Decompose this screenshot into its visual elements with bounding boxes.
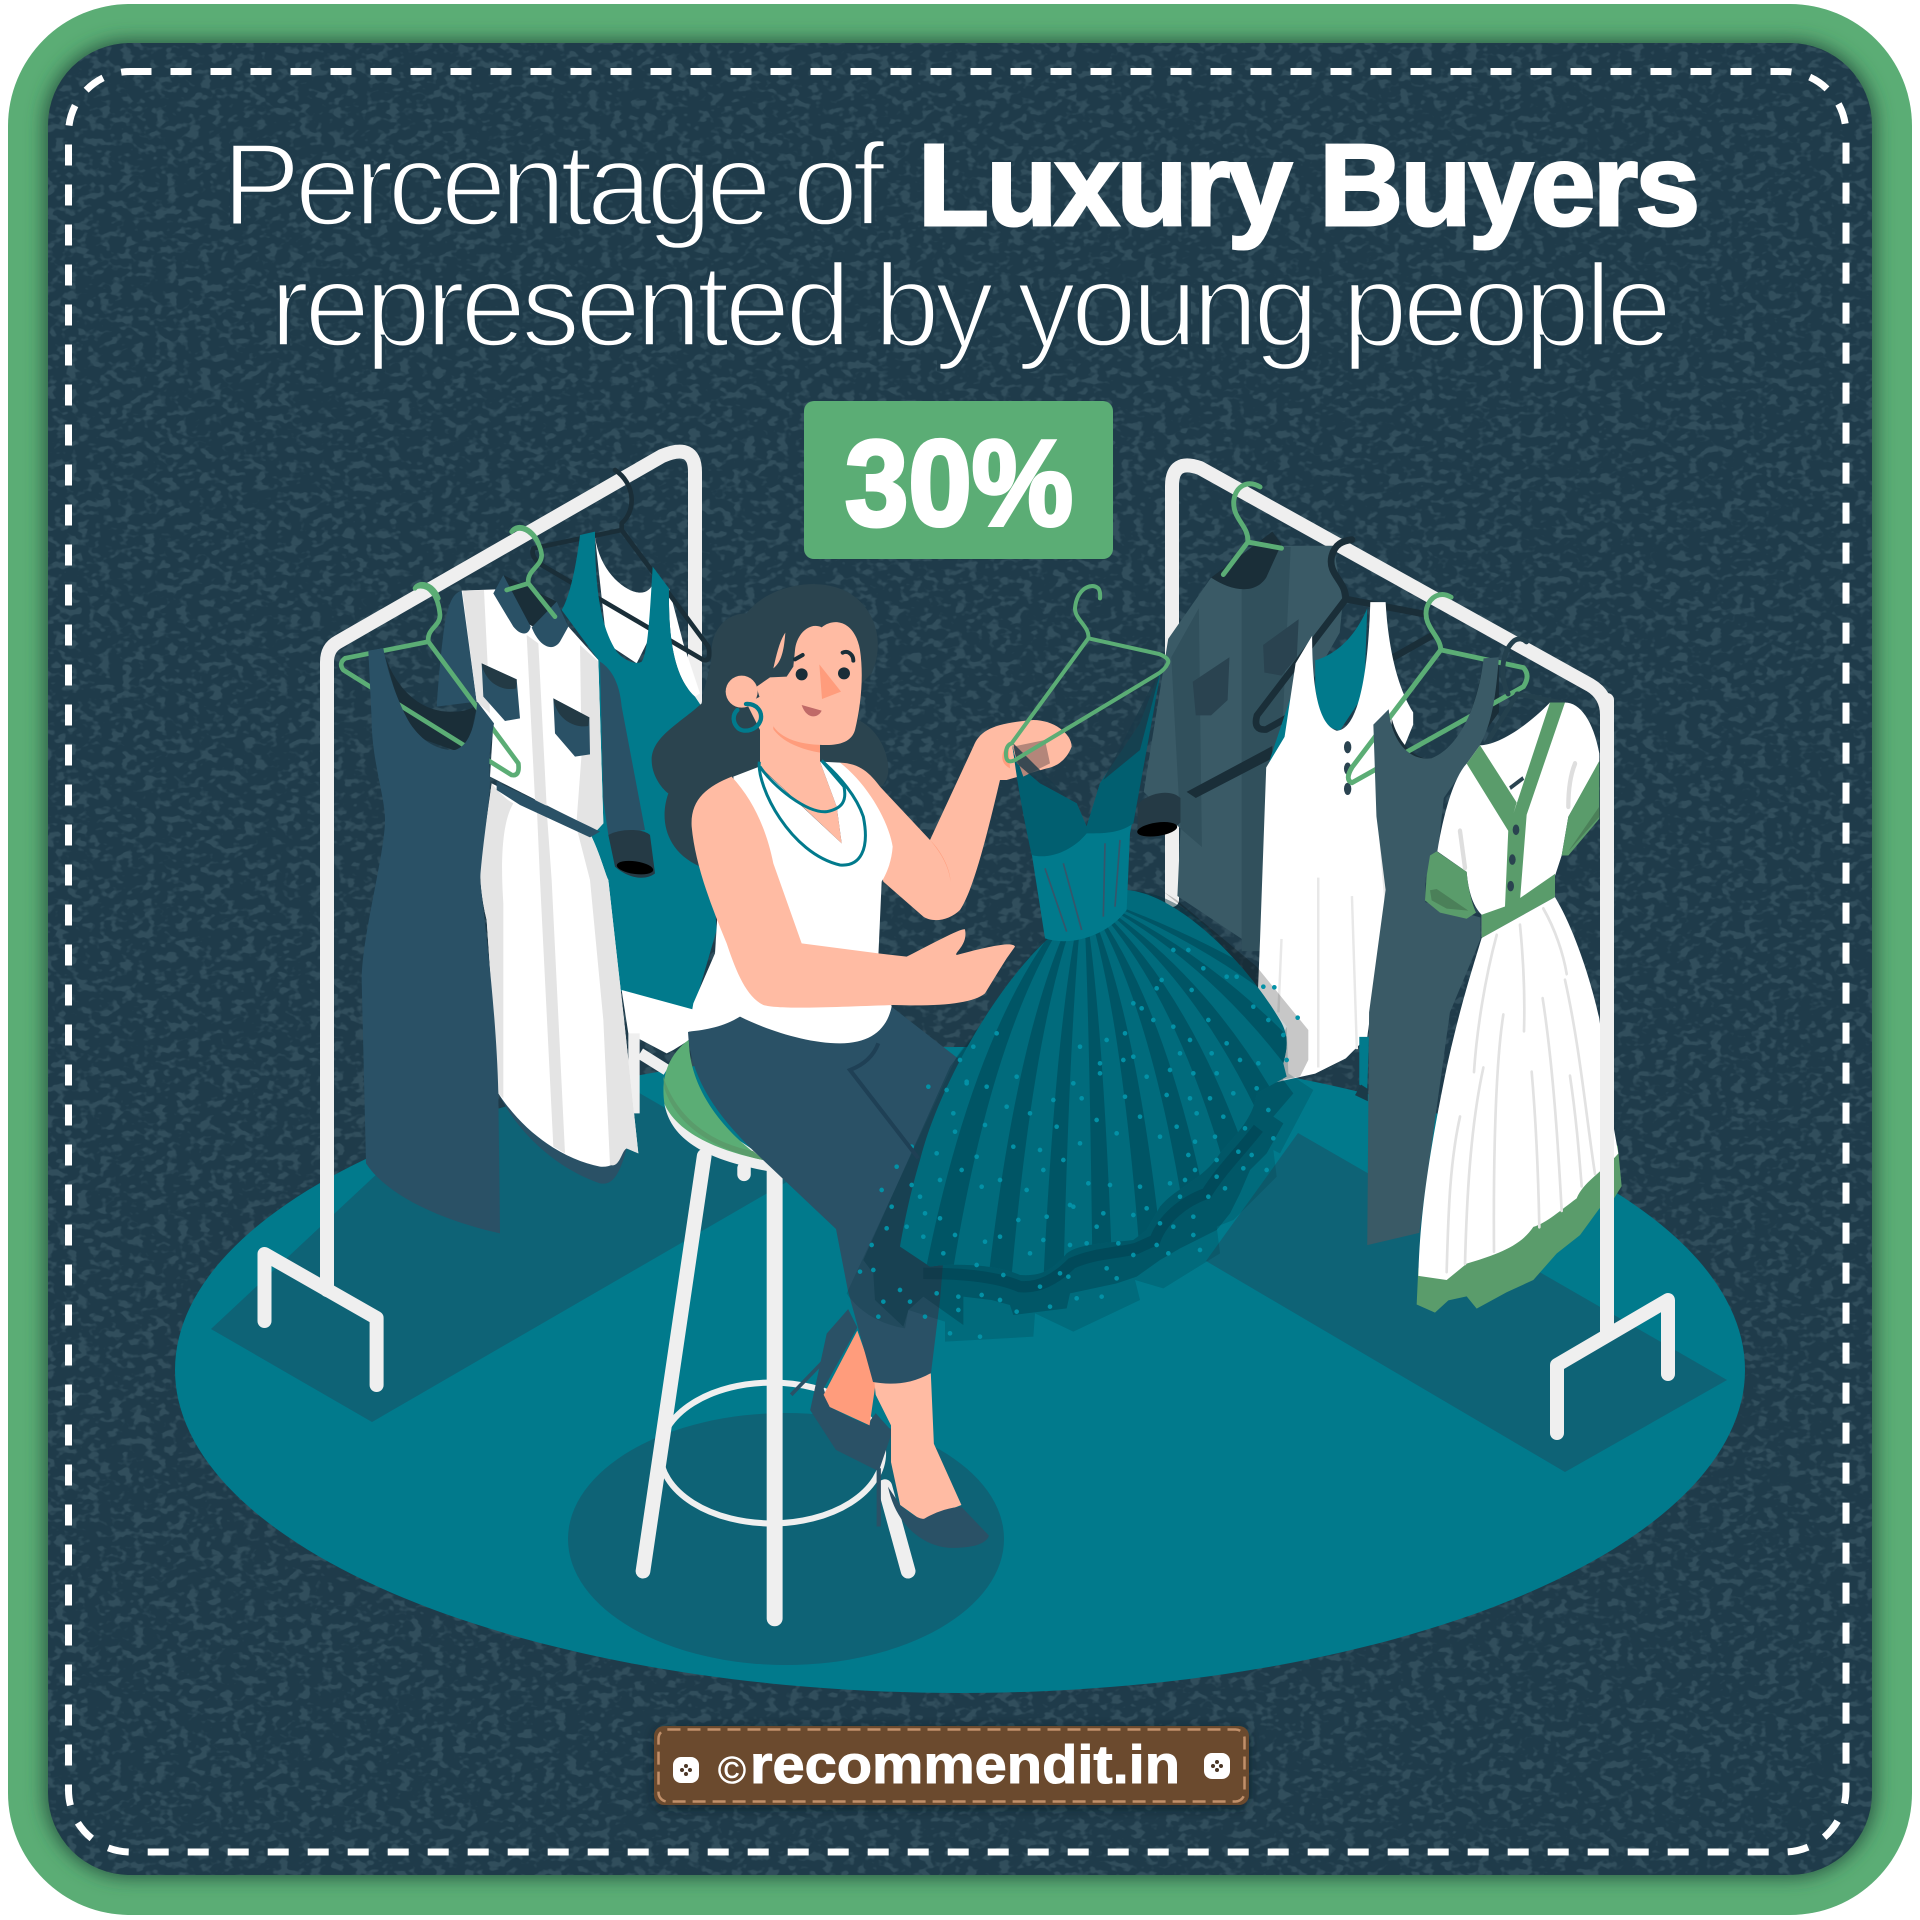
coat cuff xyxy=(608,830,655,878)
dark hanger right xyxy=(1487,639,1563,743)
buttons xyxy=(1507,824,1519,891)
coat belt xyxy=(1187,746,1272,798)
green hanger two xyxy=(507,528,555,617)
mid tulle xyxy=(863,892,1293,1327)
earring xyxy=(734,704,761,731)
right button xyxy=(1204,1753,1230,1779)
slate dress xyxy=(1367,657,1499,1245)
rear shoe xyxy=(810,1309,892,1471)
tag stitching xyxy=(658,1730,1244,1802)
sleeve crease xyxy=(1460,764,1575,868)
mouth xyxy=(802,705,822,716)
woman hair back xyxy=(652,584,888,867)
gown bodice xyxy=(1006,586,1168,941)
green hanger one xyxy=(341,586,519,775)
coat sleeve xyxy=(600,662,645,835)
woman pants xyxy=(688,1007,960,1384)
thumb shadow xyxy=(1002,743,1010,768)
white coat lower hem shadow xyxy=(498,1093,627,1184)
coat collar xyxy=(503,575,557,627)
stool seat rim xyxy=(664,1095,781,1171)
woman left arm and hand xyxy=(692,777,1015,1008)
neck shadow xyxy=(768,720,820,753)
bodice body xyxy=(1012,667,1162,941)
right rug shadow xyxy=(1206,1133,1727,1472)
coat cuff opening xyxy=(1136,820,1178,839)
woman legs and shoes xyxy=(791,1309,989,1548)
title line 1 light: Percentage of xyxy=(222,119,885,251)
eyes xyxy=(796,667,850,680)
brows xyxy=(795,652,853,661)
skirt hem shadow xyxy=(923,1128,1258,1287)
stool legs xyxy=(643,1156,908,1618)
cuff opening xyxy=(616,859,654,876)
title line 2: represented by young people xyxy=(270,240,1672,372)
stool shadow xyxy=(568,1413,1004,1665)
stool seat xyxy=(663,1040,764,1160)
face xyxy=(757,622,862,745)
gown hanger xyxy=(1006,586,1168,761)
copyright mark: © xyxy=(718,1750,746,1792)
skirt pleats xyxy=(927,910,1287,1272)
right arm xyxy=(840,720,1072,920)
skirt main xyxy=(900,890,1287,1275)
green hanger right xyxy=(1223,484,1527,783)
skirt pleats xyxy=(1447,909,1595,1272)
white dress teal lining xyxy=(1269,608,1367,766)
back rack foot xyxy=(634,1033,667,1113)
necklace xyxy=(759,761,865,865)
green trim xyxy=(1467,702,1599,938)
white top xyxy=(688,762,893,1043)
front leg xyxy=(874,1373,961,1520)
bodice pleat lines xyxy=(1045,840,1120,932)
percentage badge xyxy=(804,401,1113,559)
arm shadow xyxy=(930,840,951,882)
gathered fabric over fingers xyxy=(1013,740,1050,777)
nose xyxy=(819,664,841,699)
neck line xyxy=(1510,778,1523,788)
right rack hooks and front post xyxy=(1557,700,1668,1433)
left clothing rack xyxy=(264,452,695,1385)
ear lobe join xyxy=(747,690,773,730)
brand name: recommendit.in xyxy=(750,1735,1180,1795)
rear foot xyxy=(824,1331,876,1425)
left rack clothes xyxy=(341,470,717,1233)
brand tag xyxy=(654,1726,1249,1808)
slate dress inner neck xyxy=(1389,657,1499,780)
stool xyxy=(643,1040,908,1618)
glitter dots xyxy=(860,950,1298,1337)
title line 1 bold: Luxury Buyers xyxy=(918,120,1700,250)
coat belt xyxy=(497,782,600,837)
pockets xyxy=(482,663,590,757)
left rug shadow xyxy=(211,1093,786,1422)
dress buttons xyxy=(1344,741,1351,795)
teal dress xyxy=(562,532,717,1013)
white coat skirt xyxy=(480,783,638,1167)
dress hem shadow xyxy=(1355,1085,1368,1101)
grey tulle shadow over white dress xyxy=(1163,892,1308,1090)
percentage value: 30% xyxy=(845,415,1073,551)
ear xyxy=(726,676,758,708)
skirt xyxy=(1418,897,1618,1280)
teal dress frill xyxy=(622,990,700,1053)
right clothing rack back xyxy=(1172,465,1607,900)
coat collar xyxy=(1211,532,1282,589)
dark coat hanger xyxy=(1256,540,1432,730)
leather tag xyxy=(654,1726,1249,1805)
left button xyxy=(673,1757,699,1783)
tag shadow xyxy=(654,1728,1249,1808)
navy dress inner neck xyxy=(383,650,477,751)
title xyxy=(222,119,1700,372)
hair sliver of skin xyxy=(773,633,785,668)
dark strap shade xyxy=(1013,667,1162,797)
ball gown skirt xyxy=(846,890,1313,1342)
dress pleats xyxy=(1278,829,1386,1068)
white dress xyxy=(1257,602,1413,1086)
front shoe xyxy=(888,1487,989,1548)
vintage white dress xyxy=(1417,702,1622,1313)
coat cuff xyxy=(1138,793,1180,837)
dress crease on pants xyxy=(850,1043,918,1158)
outer tulle xyxy=(847,892,1313,1342)
neck xyxy=(760,717,842,843)
rear heel xyxy=(791,1361,824,1395)
bodice bust xyxy=(1013,667,1162,856)
woman upper body xyxy=(688,622,1072,1043)
white dress hem teal xyxy=(1359,1037,1369,1089)
left rack hook over bar xyxy=(415,527,538,598)
navy dress xyxy=(362,648,500,1233)
slate coat xyxy=(1144,546,1343,951)
front heel xyxy=(875,1468,882,1526)
coat pockets xyxy=(1193,619,1299,715)
teal dress back white lining xyxy=(595,537,653,663)
circular platform xyxy=(175,1040,1745,1693)
right rack clothes xyxy=(1136,484,1563,1245)
dark hanger xyxy=(533,470,709,660)
skirt hem xyxy=(1417,1145,1622,1313)
green sleeve xyxy=(1425,851,1476,919)
coat left side xyxy=(437,591,487,707)
white coat top xyxy=(462,589,603,831)
bodice xyxy=(1437,702,1599,937)
